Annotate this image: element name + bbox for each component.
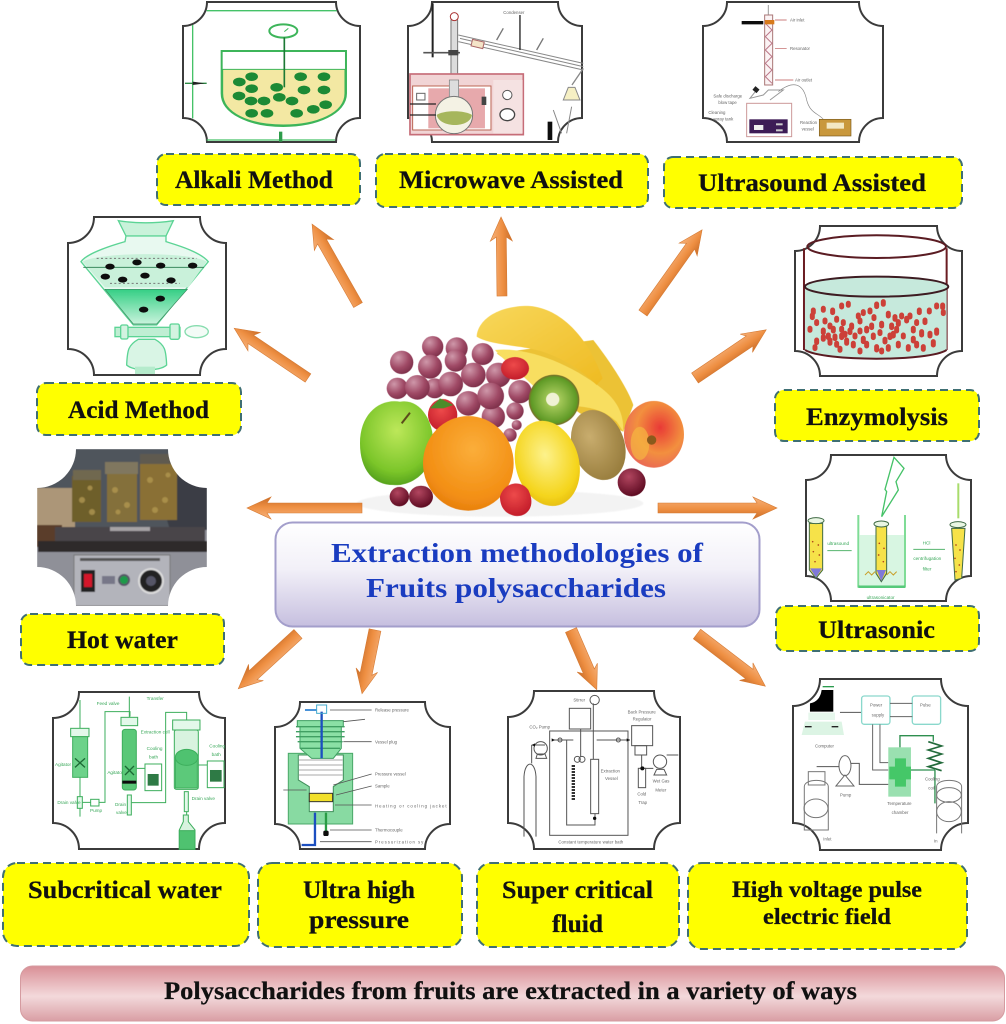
arrow: to hot water (247, 497, 362, 519)
arrow: to acid method (228, 319, 314, 387)
arrow: to ultrasound assisted (634, 223, 711, 319)
central title box: Fruits polysaccharides (366, 573, 666, 603)
icon: subcritical water apparatus: bath (149, 754, 158, 759)
icon: pulsed electric field apparatus: supply (872, 713, 885, 718)
arrow: to ultrasonic (658, 497, 777, 519)
label: super critical fluid (477, 863, 679, 947)
bottom summary banner: Polysaccharides from fruits are extracted in a variety of ways (164, 978, 857, 1005)
icon: pulsed electric field apparatus: Inlet (823, 837, 832, 842)
icon: separating funnel (81, 221, 208, 374)
icon: supercritical CO2 apparatus: Vessel (605, 776, 618, 781)
label: ultrasound assisted (664, 157, 962, 208)
label: ultrasonic (776, 606, 979, 651)
icon: pressure vessel: Release pressure (375, 708, 409, 713)
icon: supercritical CO2 apparatus: Regulator (633, 717, 652, 722)
frame: ultrasonic diagram (806, 455, 971, 601)
label: high voltage pulse electric field (688, 863, 967, 949)
panel: ultra high pressure (258, 702, 462, 947)
icon: ultrasonic tubes and bath: ultrasound (827, 541, 849, 546)
central title box: Extraction methodologies of (331, 538, 704, 568)
photo: jars on a hot plate (37, 449, 207, 606)
arrow: to high voltage pulse (690, 625, 772, 695)
label: ultra high pressure: Ultra high (303, 877, 415, 904)
label: ultra high pressure: pressure (309, 907, 409, 934)
icon: subcritical water apparatus: bath (212, 752, 221, 757)
label: subcritical water (3, 863, 249, 946)
label: alkali method (157, 154, 360, 205)
icon: ultrasonic tubes and bath: filter (923, 567, 932, 572)
frame: subcritical diagram (53, 692, 225, 849)
arrow: to microwave assisted (490, 217, 513, 296)
panel: hot water (21, 449, 224, 665)
label: hot water (21, 614, 224, 665)
panel: acid method (37, 217, 241, 435)
icon: supercritical CO2 apparatus (524, 695, 678, 845)
icon: ultrasound column and reactor: Safe discharge (713, 93, 743, 98)
icon: pulsed electric field apparatus: Pump (840, 793, 852, 798)
icon: pulsed electric field apparatus: In (934, 839, 938, 844)
icon: subcritical water apparatus: Cooling (209, 744, 226, 749)
icon: ultrasound column and reactor: Reaction (800, 120, 818, 125)
icon: ultrasound column and reactor: Resonator (790, 46, 811, 51)
icon: supercritical CO2 apparatus: Wet Gas (653, 779, 669, 784)
icon: ultrasound column and reactor (708, 5, 851, 137)
arrow: to subcritical water (231, 626, 305, 697)
panel: ultrasonic (776, 455, 979, 651)
label: microwave assisted (376, 154, 648, 207)
label: ultrasound assisted: Ultrasound Assisted (698, 170, 926, 197)
icon: pulsed electric field apparatus: Pulse (920, 703, 931, 708)
panel: enzymolysis (775, 226, 979, 441)
icon: ultrasound column and reactor: spray tank (713, 117, 734, 122)
icon: subcritical water apparatus (55, 696, 226, 849)
icon: ultrasound column and reactor: Air inlet (790, 18, 805, 23)
label: ultrasonic: Ultrasonic (818, 617, 935, 644)
panel: microwave assisted (376, 2, 648, 207)
icon: pressure vessel: Vessel plug (375, 740, 398, 745)
icon: subcritical water apparatus: Feed valve (97, 701, 120, 706)
bottom summary banner (20, 966, 1004, 1021)
icon: pulsed electric field apparatus: Temperature (887, 801, 912, 806)
arrow: to alkali method (302, 219, 368, 310)
icon: supercritical CO2 apparatus: Trap (638, 800, 648, 805)
icon: microwave with condenser and flask (410, 3, 583, 140)
label: enzymolysis: Enzymolysis (806, 404, 948, 431)
icon: supercritical CO2 apparatus: Cold (637, 792, 647, 797)
icon: subcritical water apparatus: Cooling (147, 746, 163, 751)
icon: subcritical water apparatus: Agitator (55, 762, 71, 767)
icon: pulsed electric field apparatus: chamber (892, 810, 909, 815)
icon: subcritical water apparatus: Transfer (147, 696, 164, 701)
icon: ultrasound column and reactor: Air outlet (795, 78, 813, 83)
label: enzymolysis (775, 390, 979, 441)
label: super critical fluid: Super critical (502, 877, 653, 904)
icon: pressure vessel: Pressure vessel (375, 772, 406, 777)
icon: ultrasound column and reactor: vessel (802, 127, 814, 132)
icon: supercritical CO2 apparatus: CO₂ Pump (529, 724, 551, 729)
icon: pressure vessel: Thermocouple (375, 827, 403, 832)
icon: beaker with enzyme particles (804, 235, 948, 359)
panel: subcritical water (3, 692, 249, 946)
central title box (276, 522, 760, 626)
panel: super critical fluid (477, 691, 680, 947)
icon: microwave with condenser and flask: Condenser (503, 10, 525, 15)
icon: pulsed electric field apparatus (802, 687, 962, 844)
icon: subcritical water apparatus: Agitator (107, 770, 124, 775)
icon: ultrasound column and reactor: Cleaning (708, 110, 726, 115)
icon: ultrasonic tubes and bath (808, 457, 966, 600)
icon: pressure vessel: Sample (375, 784, 390, 789)
icon: subcritical water apparatus: Extraction cell (141, 729, 170, 734)
icon: pressure vessel: Heating or cooling jacket (375, 803, 447, 808)
label: alkali method: Alkali Method (175, 167, 333, 194)
frame: alkali diagram (183, 2, 360, 142)
label: high voltage pulse electric field: electric field (763, 904, 891, 929)
image: fruit pile (357, 306, 684, 517)
icon: subcritical water apparatus: Drain valve (57, 800, 81, 805)
icon: supercritical CO2 apparatus: Back Pressure (628, 709, 656, 714)
icon: ultrasonic tubes and bath: ultrasonicator (867, 595, 895, 600)
icon: supercritical CO2 apparatus: Stirrer (573, 698, 586, 703)
icon: pulsed electric field apparatus: coil (928, 785, 935, 790)
label: hot water: Hot water (67, 627, 178, 654)
icon: pressure vessel (283, 705, 447, 845)
icon: pulsed electric field apparatus: Cooling (925, 777, 940, 782)
frame: ultra high pressure diagram (275, 702, 450, 849)
icon: supercritical CO2 apparatus: Meter (655, 788, 667, 793)
label: microwave assisted: Microwave Assisted (399, 167, 623, 194)
frame: acid diagram (68, 217, 226, 375)
icon: subcritical water apparatus: Drain (115, 802, 127, 807)
frame: enzymolysis diagram (795, 226, 962, 376)
frame: microwave diagram (408, 2, 582, 142)
panel: ultrasound assisted (664, 2, 962, 208)
frame: super critical fluid diagram (508, 691, 680, 849)
panel: high voltage pulse electric field (688, 679, 968, 949)
icon: ultrasound column and reactor: blow tape (718, 100, 737, 105)
icon: pulsed electric field apparatus: Computer (815, 743, 835, 748)
label: ultra high pressure (258, 863, 462, 947)
label: high voltage pulse electric field: High voltage pulse (732, 877, 922, 902)
icon: subcritical water apparatus: Pump (90, 808, 103, 813)
label: super critical fluid: fluid (552, 911, 603, 938)
icon: pulsed electric field apparatus: Power (870, 703, 883, 708)
icon: ultrasonic tubes and bath: HCl (923, 540, 930, 545)
arrow: to ultra high pressure (351, 628, 386, 696)
label: acid method: Acid Method (68, 397, 209, 424)
icon: pressure vessel: Pressurization sy (375, 839, 424, 844)
icon: alkali extraction vessel (185, 11, 346, 142)
icon: subcritical water apparatus: Drain valve (192, 796, 215, 801)
frame: high voltage diagram (793, 679, 968, 850)
icon: ultrasonic tubes and bath: centrifugation (913, 556, 942, 561)
icon: supercritical CO2 apparatus: Constant temperature water bath (558, 840, 624, 845)
arrow: to super critical fluid (561, 626, 607, 694)
label: subcritical water: Subcritical water (28, 877, 222, 904)
label: acid method (37, 383, 241, 435)
icon: subcritical water apparatus: valve (116, 810, 127, 815)
arrow: to enzymolysis (689, 321, 772, 387)
panel: alkali method (157, 2, 360, 205)
frame: ultrasound diagram (703, 2, 883, 142)
icon: supercritical CO2 apparatus: Extraction (601, 769, 620, 774)
